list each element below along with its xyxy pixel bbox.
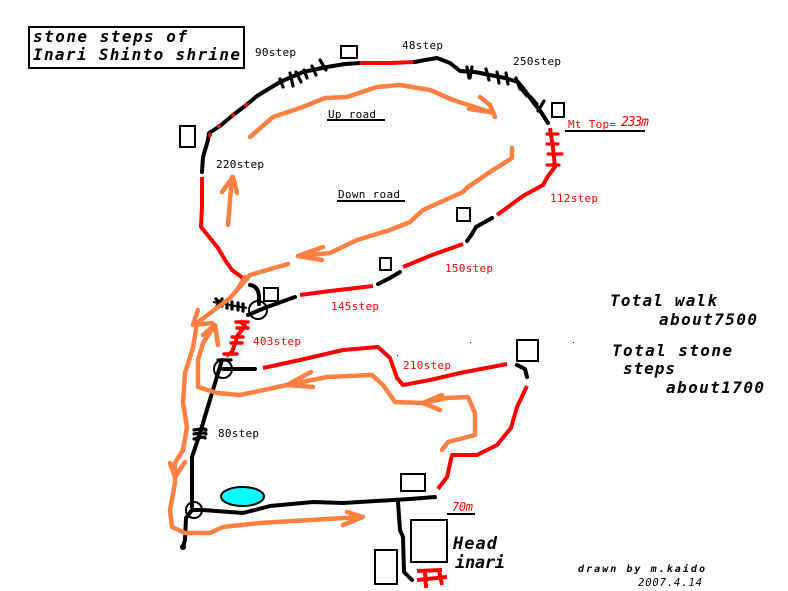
- step labels: 145step: [331, 300, 379, 313]
- step labels: 250step: [513, 55, 561, 68]
- black hook: [517, 365, 527, 377]
- black path to mountain top: [415, 58, 548, 123]
- black path junction upper: [213, 285, 295, 319]
- down road label: Down road: [338, 188, 400, 201]
- torii gate icon: [417, 570, 447, 588]
- title box: Inari Shinto shrine: [33, 45, 240, 64]
- total stone steps text: Total stone: [612, 341, 732, 360]
- 70m elevation label: 70m: [452, 500, 473, 514]
- step labels: 112step: [550, 192, 598, 205]
- step labels: 90step: [255, 46, 296, 59]
- orange route middle return: [198, 325, 475, 450]
- head inari label: [452, 534, 505, 573]
- red path to 70m: [438, 386, 527, 489]
- credit: drawn by m.kaido: [578, 563, 705, 575]
- red path 150 step: [403, 244, 463, 267]
- up road label: Up road: [328, 108, 376, 121]
- small orange up arrow: [222, 177, 237, 225]
- orange route down road: [298, 148, 512, 260]
- orange route descending west side: [170, 264, 363, 533]
- mountain top label: [565, 115, 649, 131]
- mountain top label: Mt Top=: [568, 118, 616, 131]
- credit: 2007.4.14: [638, 577, 702, 589]
- total walk text: about7500: [659, 310, 757, 329]
- black path along the bottom: [180, 497, 435, 550]
- pond: [221, 487, 264, 506]
- 90 step ticks: [280, 60, 326, 87]
- total stone steps text: [612, 341, 764, 397]
- step labels: 48step: [402, 39, 443, 52]
- red path left side 220 step: [201, 177, 244, 279]
- total stone steps text: steps: [623, 359, 675, 378]
- red path 48 step: [360, 62, 415, 63]
- step labels: 80step: [218, 427, 259, 440]
- title box: stone steps of: [33, 27, 187, 46]
- 250 step ticks: [467, 67, 544, 111]
- head inari label: Head: [452, 534, 498, 554]
- head inari label: inari: [455, 553, 505, 573]
- black path: [467, 218, 492, 241]
- credit: [578, 563, 705, 589]
- step labels: 403step: [253, 335, 301, 348]
- black path: [378, 272, 400, 284]
- red path 403 step: [224, 321, 248, 356]
- 80 step ticks: [194, 429, 206, 439]
- black main path left side: [192, 360, 255, 507]
- up road upper-left black path with red dots: [202, 63, 360, 172]
- total walk text: [610, 291, 757, 329]
- building markers: [180, 46, 564, 584]
- step labels: [216, 39, 598, 440]
- black branch to head shrine: [398, 502, 412, 580]
- red path 210 step: [263, 347, 507, 385]
- total walk text: Total walk: [610, 291, 718, 310]
- red path 112 step with ticks: [497, 128, 562, 215]
- step labels: 220step: [216, 158, 264, 171]
- step labels: 210step: [403, 359, 451, 372]
- red path 145 step: [300, 286, 373, 295]
- title box: [29, 27, 244, 68]
- mountain top label: 233m: [621, 115, 649, 130]
- total stone steps text: about1700: [666, 378, 764, 397]
- step labels: 150step: [445, 262, 493, 275]
- orange route up road: [250, 85, 495, 137]
